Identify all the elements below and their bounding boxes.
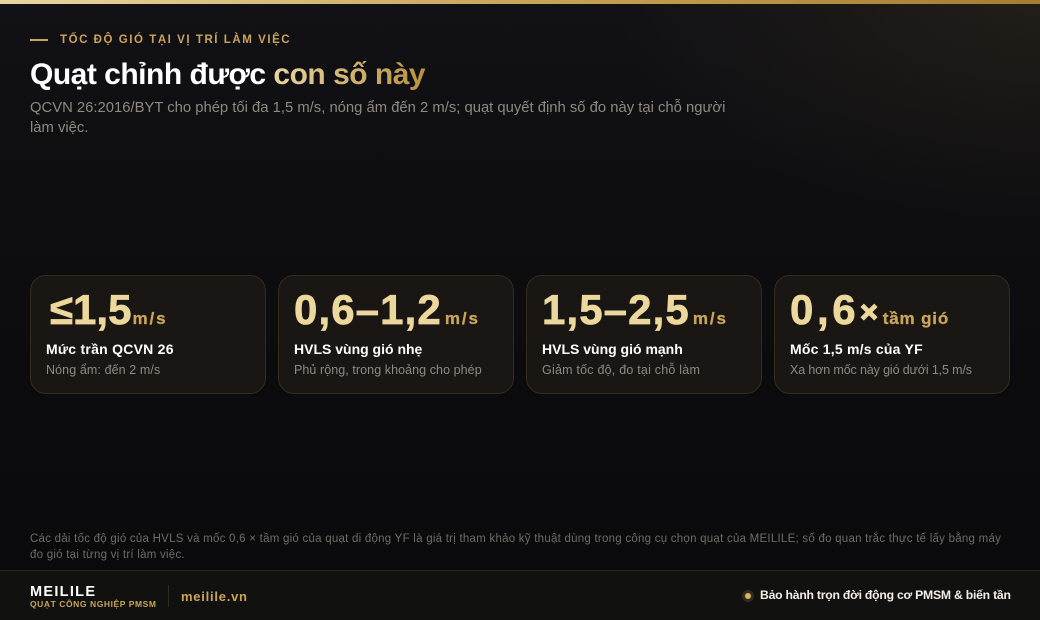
footnote bbox=[30, 532, 1001, 561]
card: HVLS light wind bbox=[278, 275, 514, 394]
card: YF mark bbox=[774, 275, 1010, 394]
brand: QUẠT CÔNG NGHIỆP PMSM bbox=[30, 599, 157, 609]
footnote: Các dải tốc độ gió của HVLS và mốc 0,6 × tầm gió của quạt di động YF là giá trị tham khảo kỹ thuật dùng trong công cụ chọn quạt của MEILILE; số đo quan trắc thực tế lấy bằng máy bbox=[30, 533, 1001, 545]
label: Mức trần QCVN 26 bbox=[46, 341, 174, 357]
note: Giảm tốc độ, đo tại chỗ làm bbox=[542, 363, 700, 377]
website: meilile.vn bbox=[181, 589, 248, 604]
note: Phủ rộng, trong khoảng cho phép bbox=[294, 363, 482, 377]
label: Mốc 1,5 m/s của YF bbox=[790, 341, 923, 357]
title: Quạt chỉnh được con số này bbox=[30, 58, 425, 91]
eyebrow heading: TỐC ĐỘ GIÓ TẠI VỊ TRÍ LÀM VIỆC bbox=[60, 34, 291, 46]
card: QCVN ceiling bbox=[30, 275, 266, 394]
subtitle: QCVN 26:2016/BYT cho phép tối đa 1,5 m/s, nóng ẩm đến 2 m/s; quạt quyết định số đo này tại chỗ người bbox=[30, 100, 725, 116]
label: HVLS vùng gió mạnh bbox=[542, 341, 683, 357]
value: 1,5–2,5m/s bbox=[542, 286, 728, 333]
footer bar bbox=[0, 570, 1040, 620]
label: HVLS vùng gió nhẹ bbox=[294, 341, 422, 357]
card: HVLS strong wind bbox=[526, 275, 762, 394]
value: 0,6–1,2m/s bbox=[294, 286, 480, 333]
warranty note: Bảo hành trọn đời động cơ PMSM & biến tần bbox=[760, 588, 1011, 602]
top accent bar bbox=[0, 0, 1040, 4]
brand: MEILILE bbox=[30, 584, 96, 600]
subtitle: làm việc. bbox=[30, 120, 88, 136]
subtitle bbox=[30, 99, 725, 136]
brand bbox=[30, 584, 157, 609]
footnote: đo gió tại từng vị trí làm việc. bbox=[30, 549, 185, 561]
note: Nóng ẩm: đến 2 m/s bbox=[46, 363, 160, 377]
note: Xa hơn mốc này gió dưới 1,5 m/s bbox=[790, 363, 972, 377]
value: 0,6× tầm gió bbox=[790, 286, 949, 333]
value: ≤1,5m/s bbox=[50, 286, 167, 333]
